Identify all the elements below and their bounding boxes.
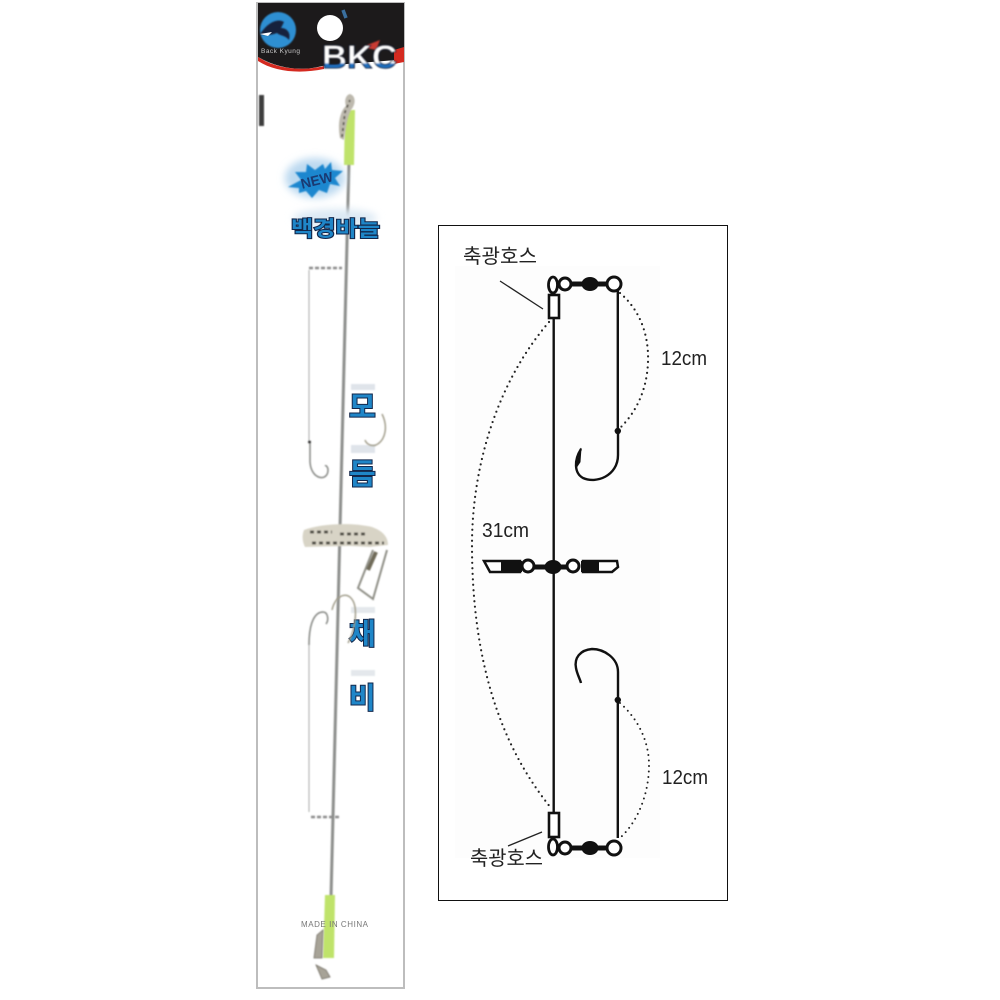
- panel: rig diagram: [438, 226, 728, 900]
- center swivel: [484, 560, 618, 574]
- badge: NEW: [285, 158, 345, 198]
- top green tube: [344, 110, 355, 165]
- made in china text: MADE IN CHINA: [301, 920, 369, 929]
- dimension: 31cm: [472, 322, 551, 808]
- label: vertical characters: 모: [349, 392, 376, 424]
- label: vertical characters: [349, 384, 376, 715]
- top hose label: [463, 245, 543, 309]
- header band: [258, 3, 404, 75]
- bottom green tube: [323, 895, 335, 958]
- dimension: 31cm: 31cm: [482, 520, 529, 542]
- left branch top: [308, 268, 342, 478]
- dimension: lower 12cm: 12cm: [662, 767, 708, 789]
- badge: NEW: NEW: [299, 168, 335, 192]
- edge tab: [259, 95, 264, 126]
- top clip: [339, 94, 355, 140]
- left branch bottom: [309, 612, 341, 817]
- heading: product name: [291, 209, 380, 241]
- heading: product name: 백경바늘: [291, 218, 380, 241]
- top hose and swivel: [548, 277, 621, 318]
- bottom clip: [314, 930, 330, 979]
- logo: dolphin: Back Kyung: [261, 48, 300, 55]
- upper hook branch: [576, 291, 621, 480]
- main wire: [331, 160, 349, 898]
- lower hook branch: [576, 649, 621, 838]
- dimension: upper 12cm: 12cm: [661, 348, 707, 370]
- bottom hose and swivel: [548, 813, 621, 855]
- label: vertical characters: 듬: [349, 459, 376, 491]
- label: vertical characters: 채: [349, 618, 376, 651]
- logo: dolphin: [260, 12, 300, 55]
- icon: hanging hole: [317, 10, 346, 41]
- bottom hose label: 축광호스: [470, 847, 543, 870]
- dimension: upper 12cm: [620, 293, 707, 427]
- panel: product package: [257, 3, 404, 988]
- dimension: lower 12cm: [620, 703, 708, 837]
- bottom hose label: [470, 832, 543, 870]
- top hose label: 축광호스: [463, 245, 537, 268]
- logo: BKC: BKC: [322, 39, 397, 75]
- main line: [553, 318, 555, 813]
- label: vertical characters: 비: [349, 682, 376, 715]
- center swivel photo: [303, 524, 388, 599]
- right hook top: [365, 414, 385, 446]
- center hook: [332, 595, 355, 643]
